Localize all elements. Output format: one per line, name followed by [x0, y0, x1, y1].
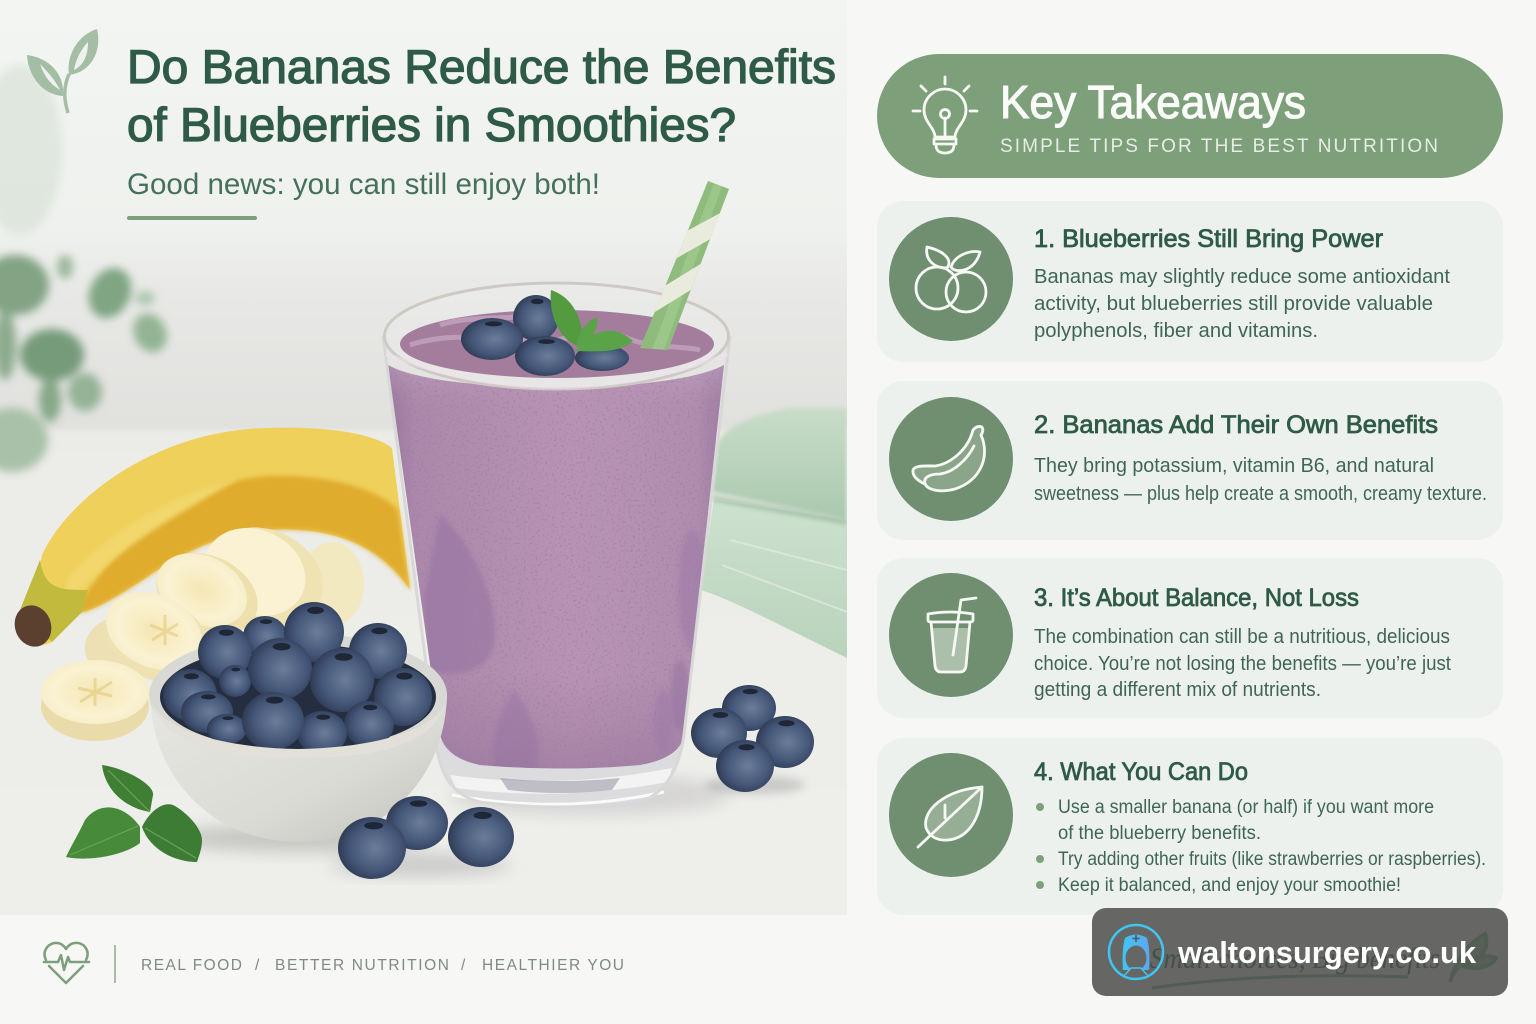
- body text: The combination can still be a nutritious, delicious: [1034, 625, 1450, 648]
- title: of Blueberries in Smoothies?: [127, 98, 736, 151]
- glass base: [438, 740, 681, 804]
- header subtitle: SIMPLE TIPS FOR THE BEST NUTRITION: [1000, 136, 1438, 157]
- panel: takeaway 2: [877, 381, 1503, 540]
- mint sprig on top: [551, 290, 633, 351]
- panel: takeaway 1: [877, 201, 1503, 362]
- glass rim: [384, 283, 728, 389]
- icon: leaf: [918, 787, 982, 847]
- bullet list: [1036, 797, 1486, 896]
- watermark badge: [1092, 908, 1508, 996]
- bullet list: Try adding other fruits (like strawberries or raspberries).: [1058, 849, 1486, 870]
- heading: 4. What You Can Do: [1034, 758, 1248, 786]
- footer strip: [44, 943, 624, 983]
- banana stem tip: [14, 605, 52, 647]
- smoothie surface: [400, 310, 714, 378]
- green striped straw: [640, 181, 729, 350]
- green napkin: [700, 408, 847, 658]
- icon: leaf sprig logo: [27, 29, 98, 113]
- footer tagline: [141, 957, 624, 974]
- faded script signature: Small choices, Big benefits: [1150, 942, 1440, 975]
- smoothie body: [380, 350, 730, 780]
- footer tagline: HEALTHIER YOU: [482, 957, 624, 974]
- footer tagline: /: [461, 957, 466, 974]
- footer tagline: BETTER NUTRITION: [275, 957, 449, 974]
- faded script signature: [1150, 934, 1496, 988]
- blurred foliage: [0, 65, 173, 472]
- body text: Bananas may slightly reduce some antioxidant: [1034, 265, 1450, 288]
- heading: 3. It’s About Balance, Not Loss: [1034, 584, 1359, 612]
- body text: getting a different mix of nutrients.: [1034, 678, 1321, 701]
- heading: 1. Blueberries Still Bring Power: [1034, 225, 1383, 253]
- icon: blueberries: [916, 247, 986, 312]
- body text: [1034, 454, 1487, 505]
- bowl shadow: [170, 824, 430, 852]
- footer tagline: /: [255, 957, 260, 974]
- header title: Key Takeaways: [1000, 76, 1306, 128]
- banana: [9, 428, 410, 652]
- icon: smoothie cup: [928, 598, 976, 672]
- blueberries in bowl: [163, 602, 432, 755]
- panel: smoothie photo: [0, 60, 847, 915]
- body text: They bring potassium, vitamin B6, and natural: [1034, 454, 1434, 477]
- glass of smoothie: [380, 175, 740, 807]
- loose blueberries front: [330, 796, 514, 879]
- banana slices: [41, 509, 364, 741]
- title: [127, 40, 836, 151]
- body text: choice. You’re not losing the benefits — you’re just: [1034, 652, 1451, 675]
- panel: key takeaways header: [877, 54, 1503, 178]
- footer tagline: REAL FOOD: [141, 957, 242, 974]
- bowl of blueberries: [149, 602, 447, 842]
- loose blueberries right: [691, 685, 814, 794]
- panel: takeaway 4: [877, 738, 1503, 915]
- body text: sweetness — plus help create a smooth, creamy texture.: [1034, 482, 1487, 505]
- body text: activity, but blueberries still provide valuable: [1034, 292, 1433, 315]
- bullet list: of the blueberry benefits.: [1058, 823, 1261, 844]
- subtitle: Good news: you can still enjoy both!: [127, 168, 600, 201]
- top blueberries: [461, 295, 629, 376]
- icon: banana: [913, 426, 985, 491]
- body text: polyphenols, fiber and vitamins.: [1034, 319, 1318, 342]
- wall backdrop: [0, 229, 847, 431]
- panel: takeaway 3: [877, 558, 1503, 718]
- heading: 2. Bananas Add Their Own Benefits: [1034, 411, 1438, 439]
- watermark text: waltonsurgery.co.uk: [1177, 935, 1477, 970]
- icon: heart with pulse: [44, 943, 89, 983]
- mint leaves bottom: [66, 765, 202, 862]
- glass shadow: [450, 775, 730, 815]
- bullet list: Keep it balanced, and enjoy your smoothie!: [1058, 875, 1401, 896]
- title: Do Bananas Reduce the Benefits: [127, 40, 836, 93]
- body text: [1034, 265, 1450, 342]
- logo: nurse in circle: [1109, 925, 1163, 979]
- bullet list: Use a smaller banana (or half) if you want more: [1058, 797, 1434, 818]
- tabletop: [0, 430, 870, 935]
- icon: light bulb: [913, 77, 977, 153]
- glass walls: [383, 336, 730, 807]
- body text: [1034, 625, 1451, 701]
